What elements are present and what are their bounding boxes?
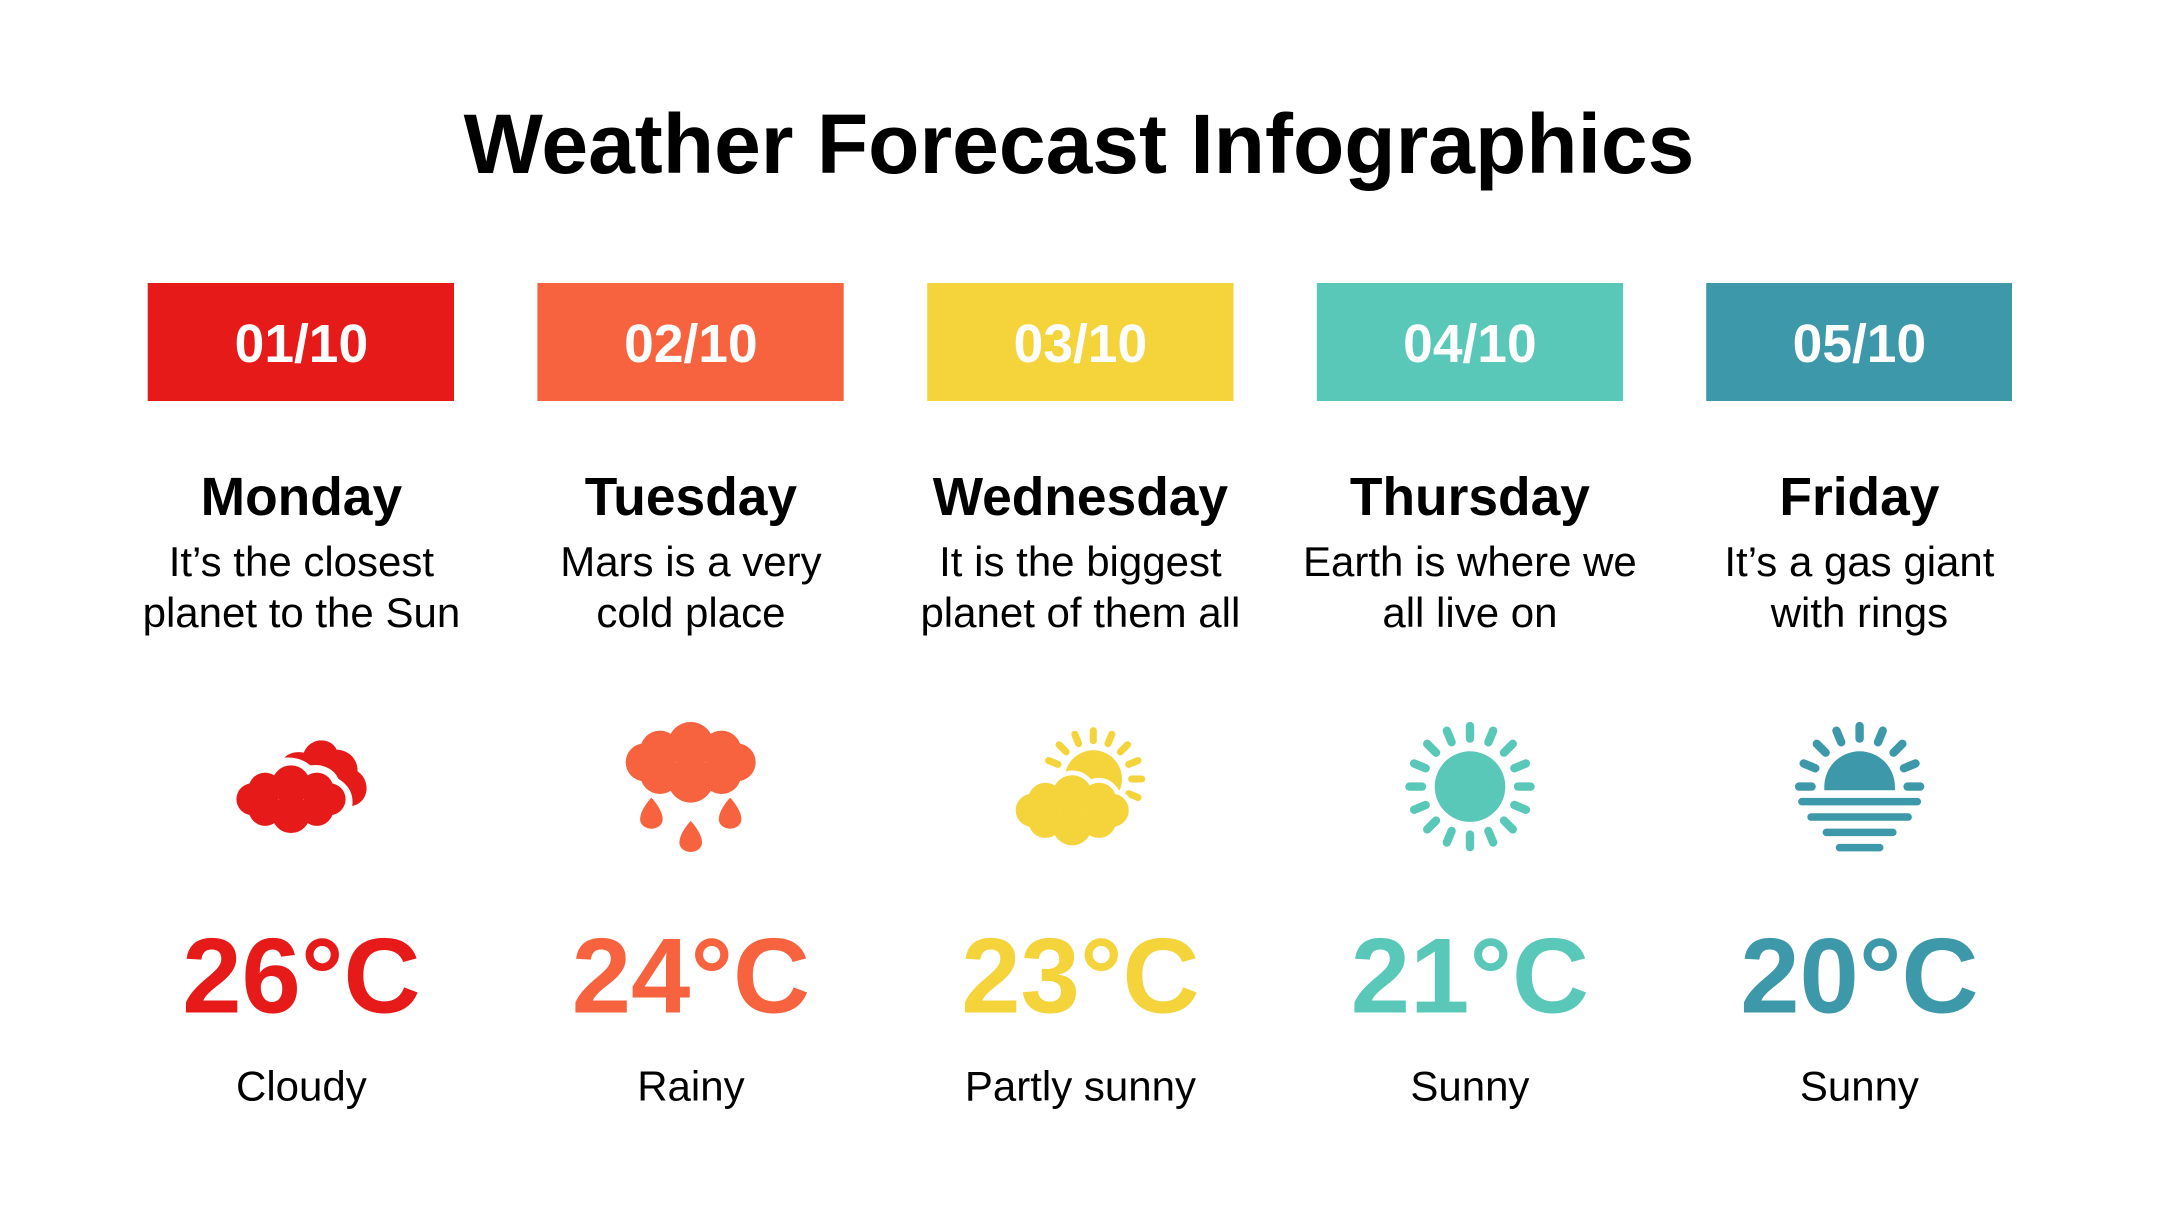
- temperature: 21°C: 21°C: [1351, 916, 1589, 1036]
- date badge: 05/10: 05/10: [1793, 315, 1926, 374]
- temperature: 23°C: 23°C: [961, 916, 1200, 1036]
- date badge: 05/10: [1706, 283, 2012, 401]
- icon: sunset: [1798, 726, 1921, 851]
- panel: Thursday: [1303, 283, 1637, 1110]
- icon: rain cloud: [626, 722, 756, 852]
- date badge: 04/10: [1317, 283, 1623, 401]
- day name: Thursday: Thursday: [1350, 468, 1590, 527]
- date badge: 01/10: [148, 283, 454, 401]
- date badge: 02/10: [537, 283, 844, 401]
- condition: Rainy: Rainy: [637, 1062, 745, 1110]
- temperature: 26°C: 26°C: [182, 916, 421, 1036]
- description: Thursday: all live on: [1382, 589, 1557, 636]
- day name: Wednesday: Wednesday: [933, 468, 1228, 527]
- title: Weather Forecast Infographics: [464, 97, 1694, 191]
- condition: Partly sunny: Partly sunny: [965, 1062, 1196, 1110]
- date badge: 02/10: 02/10: [624, 315, 758, 374]
- date badge: 03/10: 03/10: [1014, 315, 1147, 374]
- description: Wednesday: It is the biggest: [939, 538, 1222, 585]
- condition: Sunny: Sunny: [1800, 1062, 1919, 1110]
- icon: sun: [1410, 726, 1530, 847]
- description: Thursday: Earth is where we: [1303, 538, 1637, 585]
- condition: Sunny: Sunny: [1410, 1062, 1529, 1110]
- description: Friday: with rings: [1770, 589, 1948, 636]
- description: Monday: planet to the Sun: [143, 589, 460, 636]
- description: Tuesday: cold place: [596, 589, 785, 636]
- temperature: 24°C: 24°C: [572, 916, 810, 1036]
- panel: Friday: [1706, 283, 2012, 1110]
- condition: Cloudy: Cloudy: [236, 1062, 367, 1110]
- panel: Tuesday: [537, 283, 844, 1110]
- description: Tuesday: Mars is a very: [560, 538, 822, 585]
- icon: partly sunny: [1016, 731, 1142, 845]
- description: Friday: It’s a gas giant: [1724, 538, 1995, 585]
- panel: Monday: [143, 283, 460, 1110]
- date badge: 03/10: [927, 283, 1234, 401]
- day name: Tuesday: Tuesday: [585, 468, 797, 527]
- day name: Monday: Monday: [201, 468, 402, 527]
- description: Monday: It’s the closest: [169, 538, 434, 585]
- temperature: 20°C: 20°C: [1740, 916, 1979, 1036]
- icon: clouds: [236, 740, 367, 833]
- date badge: 01/10: 01/10: [235, 315, 368, 374]
- date badge: 04/10: 04/10: [1403, 315, 1537, 374]
- day name: Friday: Friday: [1779, 468, 1940, 527]
- description: Wednesday: planet of them all: [920, 589, 1240, 636]
- panel: Wednesday: [920, 283, 1240, 1110]
